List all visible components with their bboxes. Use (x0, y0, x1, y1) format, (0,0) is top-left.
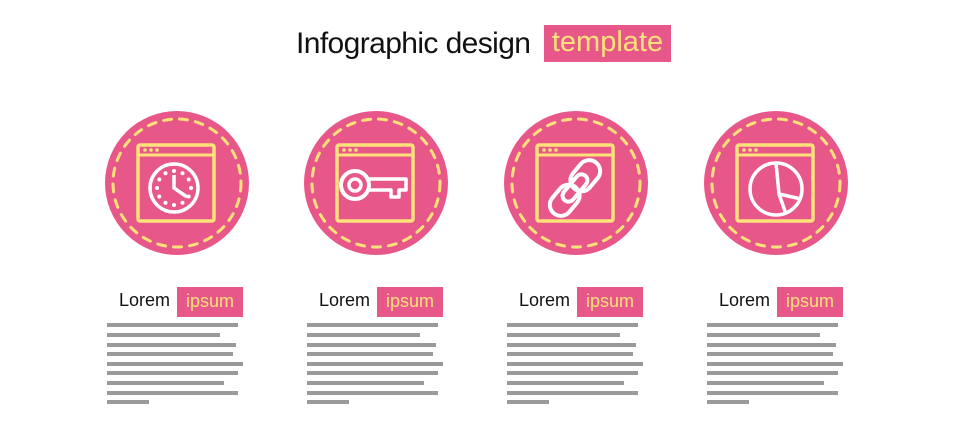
icon: link circle (504, 111, 648, 255)
icon: clock circle (105, 111, 249, 255)
label 2 (319, 287, 443, 317)
title: Infographic design (296, 27, 530, 60)
text lines (107, 323, 843, 404)
label 1: Lorem (119, 290, 170, 310)
label 3 (519, 287, 643, 317)
label 4: Lorem (719, 290, 770, 310)
label 3: ipsum (586, 291, 634, 311)
label 2: Lorem (319, 290, 370, 310)
icon: key circle (304, 111, 448, 255)
label 4 (719, 287, 843, 317)
icon: pie chart circle (704, 111, 848, 255)
label 3: Lorem (519, 290, 570, 310)
label 1: ipsum (186, 291, 234, 311)
label 4: ipsum (786, 291, 834, 311)
title: template (552, 26, 663, 58)
label 2: ipsum (386, 291, 434, 311)
label 1 (119, 287, 243, 317)
title (296, 25, 671, 62)
